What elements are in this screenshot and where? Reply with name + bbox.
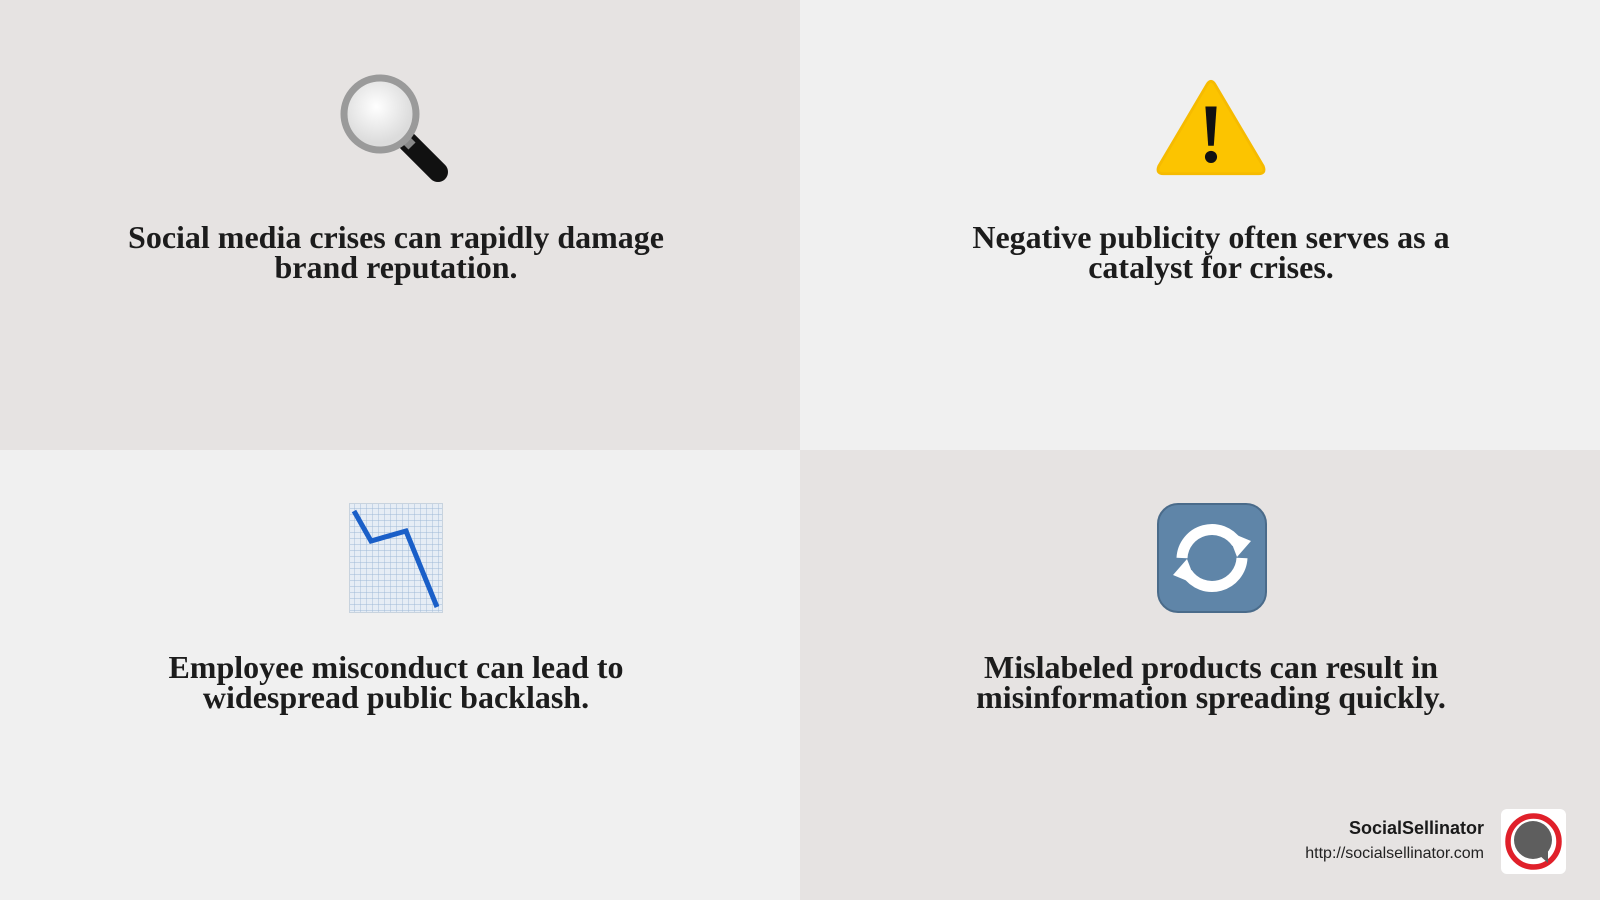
panel: mislabeled: [800, 450, 1600, 900]
text: reputation: Social media crises can rapidly damage: [128, 219, 664, 255]
logo: [1501, 809, 1566, 874]
icon: warning: [1156, 80, 1266, 176]
icon: chart decreasing: [349, 503, 443, 613]
icon: magnifying glass: [340, 74, 448, 182]
text: mislabeled: misinformation spreading quickly.: [976, 679, 1446, 715]
panel: publicity: [800, 0, 1600, 450]
text: reputation: [128, 219, 664, 285]
brand: SocialSellinator: [1305, 809, 1566, 874]
icon: refresh: [1157, 503, 1267, 613]
text: publicity: Negative publicity often serves as a: [972, 219, 1450, 255]
text: misconduct: Employee misconduct can lead to: [168, 649, 624, 685]
text: mislabeled: Mislabeled products can result in: [984, 649, 1438, 685]
text: misconduct: [168, 649, 624, 715]
text: reputation: brand reputation.: [274, 249, 518, 285]
panel: misconduct: [0, 450, 800, 900]
text: publicity: catalyst for crises.: [1088, 249, 1334, 285]
brand url: http://socialsellinator.com: [1305, 845, 1484, 862]
text: misconduct: widespread public backlash.: [203, 679, 589, 715]
panel: reputation: [0, 0, 800, 450]
text: publicity: [972, 219, 1450, 285]
text: mislabeled: [976, 649, 1446, 715]
brand name: SocialSellinator: [1349, 818, 1484, 838]
